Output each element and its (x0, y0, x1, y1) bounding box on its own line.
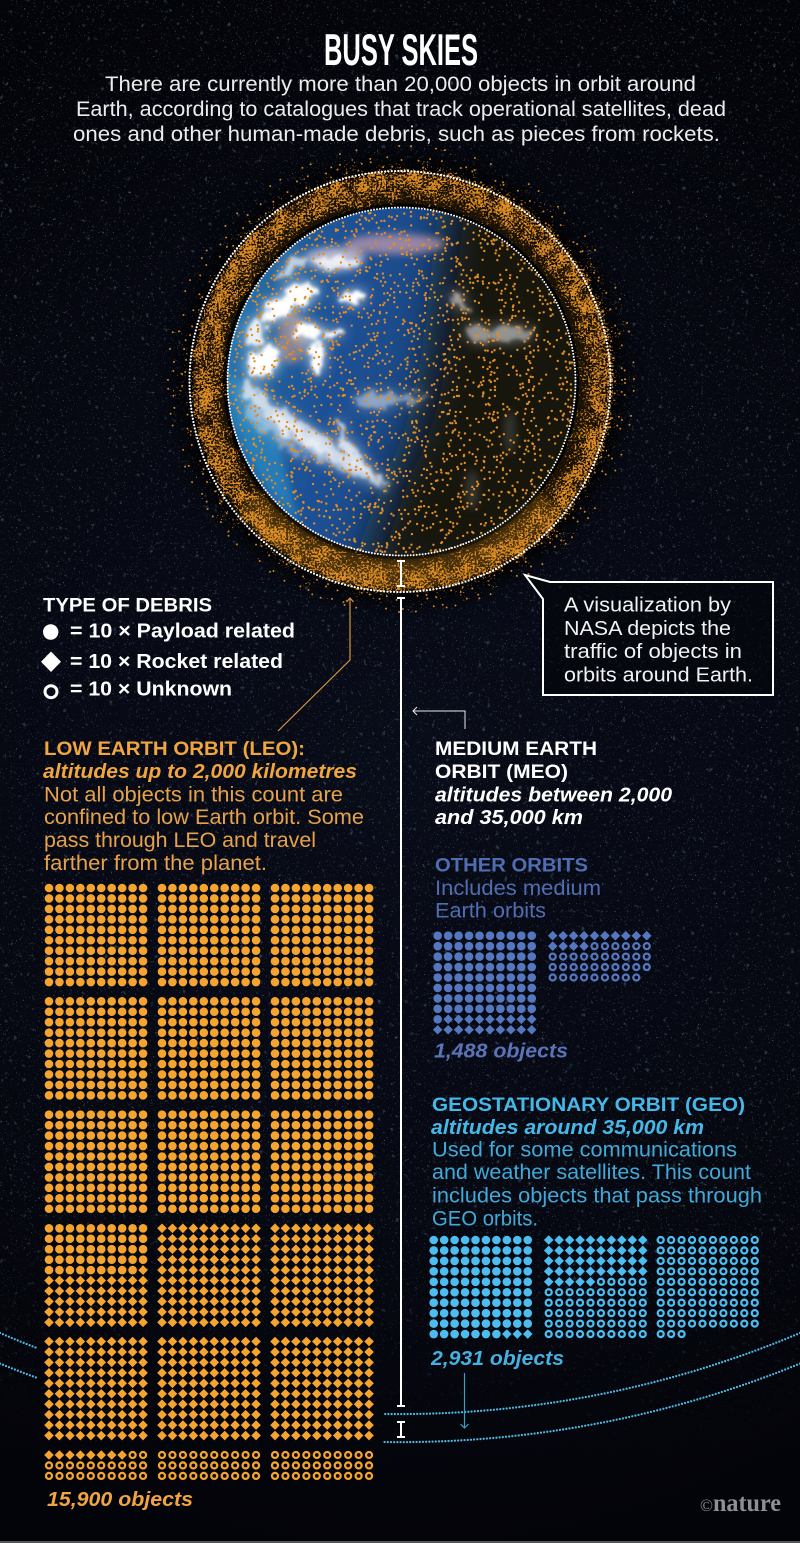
arrow: GEO pointer (460, 1373, 468, 1428)
MEO text block (435, 738, 672, 829)
dotted circle: earth surface (228, 208, 576, 556)
intro text block (73, 73, 726, 146)
other orbits text block (435, 855, 601, 923)
GEO orbit dotted arcs (0, 1333, 800, 1442)
GEO text block (431, 1094, 762, 1231)
LEO text block: pass through LEO and travel (44, 829, 316, 852)
other orbits dot grid: 1,488 objects (433, 931, 652, 1035)
LEO text block: confined to low Earth orbit. Some (44, 806, 364, 829)
GEO text block: and weather satellites. This count (432, 1161, 751, 1184)
legend: type of debris: = 10 × Rocket related (70, 651, 283, 673)
other orbits count label: 1,488 objects (434, 1040, 568, 1063)
LEO text block (43, 738, 364, 875)
LEO text block: farther from the planet. (44, 852, 267, 875)
credit: nature: © (700, 1496, 713, 1515)
callout: NASA visualization: NASA depicts the (564, 617, 731, 640)
MEO text block: ORBIT (MEO) (435, 761, 568, 783)
MEO text block: altitudes between 2,000 (435, 785, 672, 807)
callout: NASA visualization (525, 575, 773, 695)
arrow: LEO to ring (278, 598, 354, 731)
GEO text block: Used for some communications (432, 1139, 737, 1162)
callout: NASA visualization: traffic of objects in (564, 640, 742, 663)
other orbits text block: OTHER ORBITS (435, 855, 588, 877)
callout: NASA visualization: orbits around Earth. (564, 664, 753, 687)
debris scatter beyond the ring (168, 146, 634, 612)
GEO text block: includes objects that pass through (432, 1185, 762, 1208)
LEO text block: Not all objects in this count are (44, 784, 343, 807)
legend: type of debris: = 10 × Unknown (70, 679, 232, 701)
title: BUSY SKIES (324, 26, 478, 75)
arrow: MEO pointer (413, 707, 465, 729)
other orbits text block: Includes medium (435, 877, 601, 900)
GEO dot grid: 2,931 objects (429, 1235, 758, 1339)
GEO text block: GEO orbits. (432, 1208, 538, 1231)
LEO text block: altitudes up to 2,000 kilometres (43, 761, 357, 783)
intro text block: There are currently more than 20,000 objects in orbit around (105, 73, 696, 96)
earth visualization with orbital debris (166, 145, 642, 616)
legend: type of debris: TYPE OF DEBRIS (43, 595, 212, 617)
debris scatter over earth (227, 208, 574, 556)
other orbits text block: Earth orbits (435, 900, 546, 923)
altitude bracket: LEO (397, 561, 405, 586)
credit: nature: nature (713, 1490, 781, 1517)
LEO count label: 15,900 objects (47, 1488, 193, 1511)
GEO count label: 2,931 objects (430, 1347, 564, 1370)
GEO text block: altitudes around 35,000 km (431, 1117, 704, 1139)
altitude line: MEO (397, 598, 405, 1406)
legend: type of debris (41, 595, 295, 701)
MEO text block: MEDIUM EARTH (435, 738, 597, 760)
altitude bracket: GEO (397, 1422, 405, 1437)
MEO text block: and 35,000 km (435, 807, 583, 829)
callout: NASA visualization: A visualization by (564, 594, 732, 617)
earth globe (227, 208, 575, 556)
LEO text block: LOW EARTH ORBIT (LEO): (44, 738, 305, 760)
debris ring base tone (208, 188, 594, 574)
GEO text block: GEOSTATIONARY ORBIT (GEO) (432, 1094, 745, 1116)
intro text block: ones and other human-made debris, such as pieces from rockets. (73, 123, 720, 146)
debris scatter in the ring (163, 141, 643, 621)
legend: type of debris: = 10 × Payload related (70, 621, 295, 643)
dotted circle: LEO boundary (190, 171, 610, 592)
LEO dot grid: 15,900 objects (44, 884, 374, 1479)
intro text block: Earth, according to catalogues that track operational satellites, dead (76, 98, 726, 121)
